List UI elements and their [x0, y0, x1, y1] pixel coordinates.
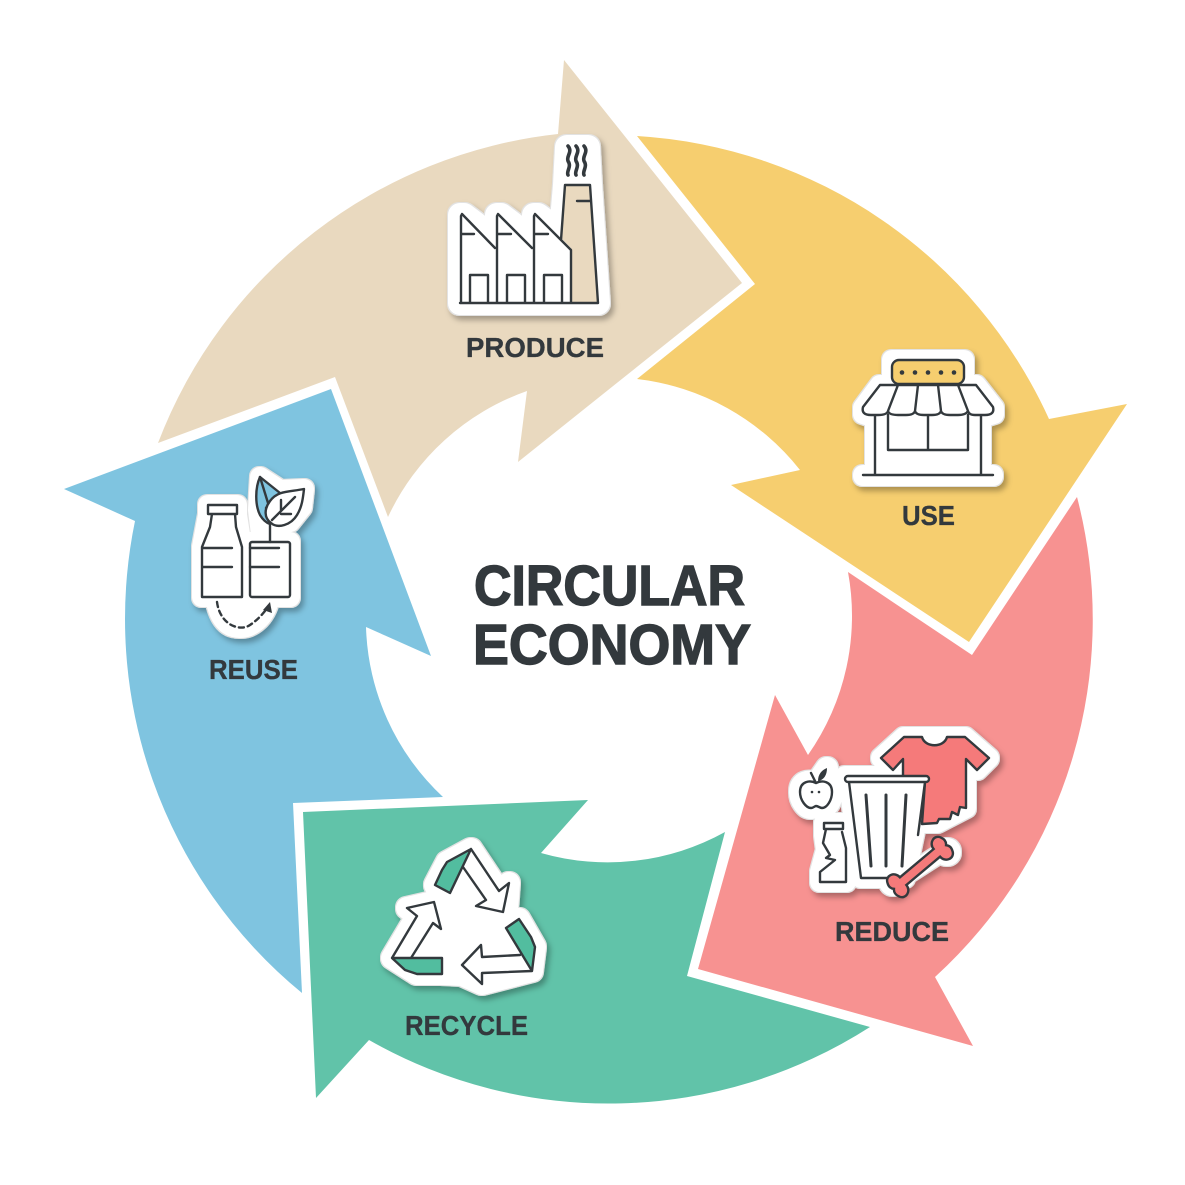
arrow: reduce red [698, 497, 1093, 1046]
label: recycle: RECYCLE [405, 1010, 528, 1041]
arrow: produce beige [158, 60, 742, 517]
icon: trash with waste [800, 737, 989, 900]
arrow: recycle green [303, 800, 870, 1104]
arrow: use yellow [637, 136, 1127, 642]
label: produce: PRODUCE [466, 332, 604, 363]
icon: bottles and leaves [202, 477, 304, 628]
label: reuse: REUSE [209, 654, 298, 685]
icon: factory [460, 146, 598, 303]
label: reduce: REDUCE [835, 916, 949, 947]
label: use: USE [902, 500, 955, 531]
panel: recycle [303, 800, 870, 1104]
icon: recycling arrows [392, 849, 535, 984]
arrow: reuse blue [64, 389, 443, 993]
panel: reuse [64, 389, 443, 993]
title: CIRCULAR [474, 554, 745, 618]
icon: shop [863, 360, 994, 476]
title: ECONOMY [473, 613, 751, 677]
panel: produce [158, 60, 742, 517]
title [473, 554, 751, 677]
panel: reduce [698, 497, 1093, 1046]
panel: use [637, 136, 1127, 642]
